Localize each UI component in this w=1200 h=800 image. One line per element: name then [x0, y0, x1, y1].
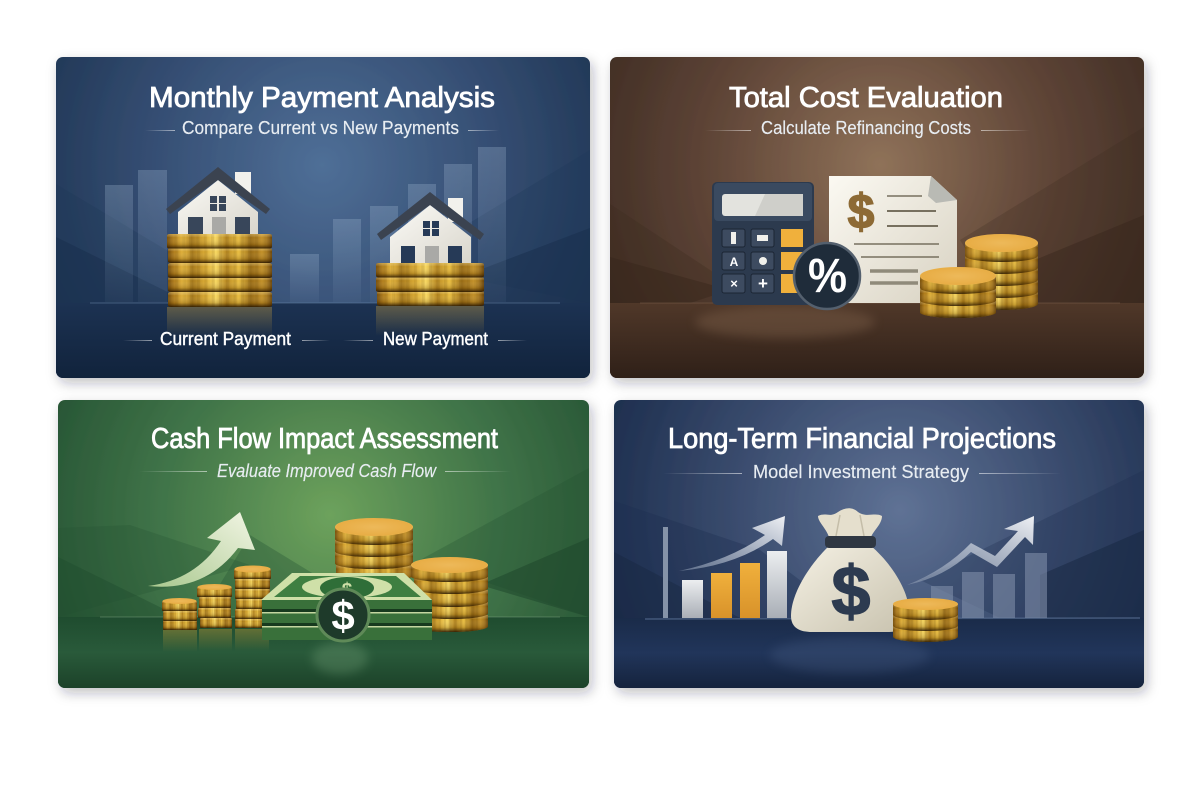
- icon: calculator: A: [730, 255, 739, 269]
- icon: small house: [377, 192, 484, 263]
- icon: money bag: [791, 508, 909, 632]
- panel: total cost evaluation: [610, 57, 1144, 378]
- icon: banknote stack: [261, 573, 432, 640]
- icon: banknote stack: $: [342, 580, 353, 601]
- icon: percent badge: [794, 243, 860, 309]
- icon: document with dollar: $: [848, 186, 875, 239]
- icon: calculator: ×: [730, 276, 738, 291]
- icon: dollar medal: [317, 589, 369, 641]
- icon: calculator: [712, 182, 814, 305]
- icon: percent badge: %: [808, 250, 847, 303]
- panel: long-term financial projections: [614, 400, 1144, 688]
- title: Monthly Payment Analysis: [149, 82, 495, 114]
- title: Total Cost Evaluation: [729, 82, 1003, 114]
- coin stacks: ascending: [162, 566, 271, 652]
- icon: document with dollar: [829, 176, 957, 303]
- bar chart: left: [663, 527, 787, 618]
- coin stack: back: [965, 234, 1038, 310]
- label: current payment: Current Payment: [160, 329, 291, 349]
- subtitle: Evaluate Improved Cash Flow: [217, 461, 437, 481]
- icon: money bag: $: [832, 552, 870, 630]
- bar chart: right: [931, 553, 1047, 618]
- icon: calculator: +: [758, 274, 768, 293]
- coin stack: right: [411, 557, 488, 632]
- arrow: rising cash flow: [148, 512, 255, 587]
- coin stack: current payment: [167, 234, 272, 337]
- panel: cash flow impact assessment: [58, 400, 589, 688]
- label: new payment: New Payment: [383, 329, 488, 349]
- background bar chart: [105, 147, 506, 302]
- subtitle: Model Investment Strategy: [753, 462, 969, 482]
- subtitle: Calculate Refinancing Costs: [761, 118, 971, 138]
- coin stack: new payment: [376, 263, 484, 336]
- title: Cash Flow Impact Assessment: [151, 423, 498, 455]
- coin stack: back tall: [335, 518, 413, 581]
- coin stack: bag side: [893, 598, 958, 642]
- arrow: right zigzag: [907, 516, 1034, 585]
- subtitle: Compare Current vs New Payments: [182, 118, 459, 138]
- panel: monthly payment analysis: [56, 57, 590, 378]
- arrow: left rising: [679, 516, 785, 571]
- title: Long-Term Financial Projections: [668, 423, 1056, 455]
- icon: large house: [166, 167, 270, 234]
- icon: dollar medal: $: [331, 592, 355, 639]
- coin stack: front: [920, 267, 996, 318]
